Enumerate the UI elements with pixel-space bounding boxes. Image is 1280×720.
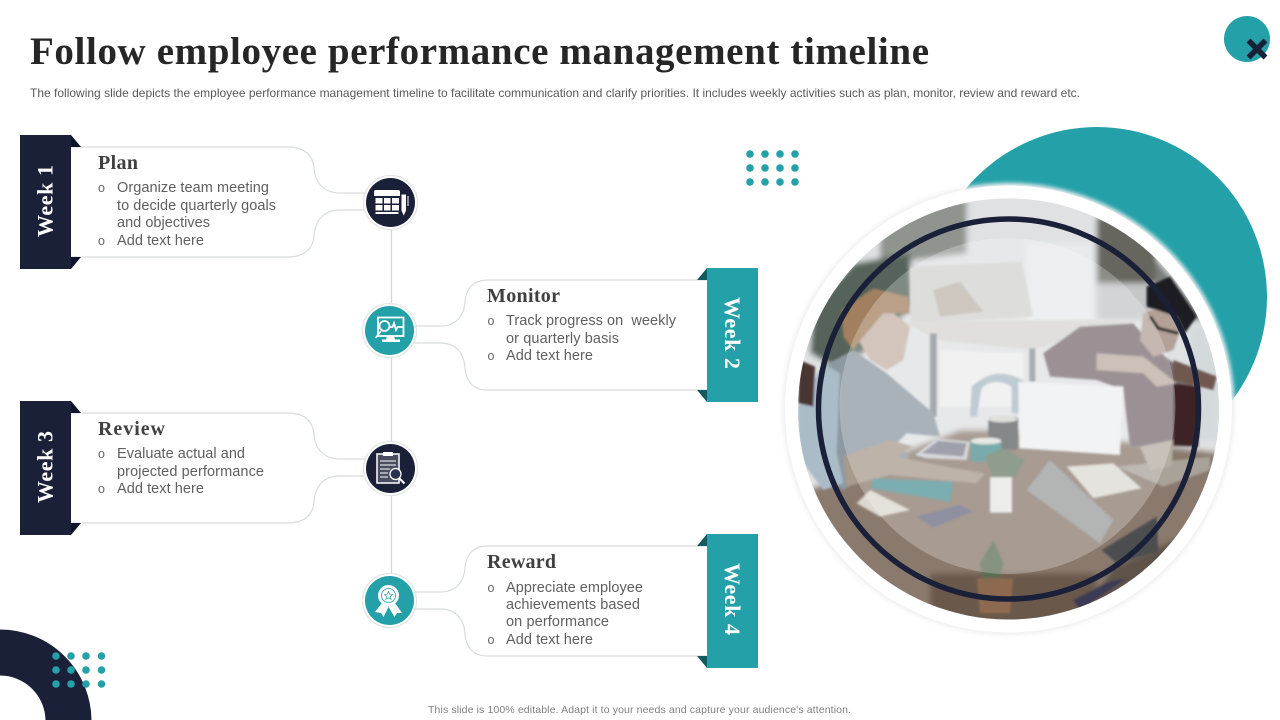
- bullets: review: Add text here: [117, 481, 204, 497]
- bullets: review: [98, 446, 264, 497]
- tab: week 2: [697, 268, 758, 402]
- panel outline: review: [71, 413, 366, 523]
- bullets: plan: o: [98, 181, 105, 195]
- bullets: plan: o: [98, 234, 105, 248]
- plant and pot: [985, 448, 1025, 478]
- heading: review: Review: [98, 418, 166, 440]
- tablet: [915, 438, 970, 460]
- icon: award ribbon: [362, 574, 416, 628]
- cups: [988, 417, 1018, 450]
- subtitle: The following slide depicts the employee performance management timeline to facilitate communication and clarify priorities. It includes weekly activities such as plan, monitor, review and reward etc.: [30, 86, 1080, 100]
- bullets: reward: o: [488, 633, 494, 647]
- bullets: monitor: Track progress on weekly: [506, 313, 677, 329]
- bullets: reward: achievements based: [506, 597, 640, 613]
- inner translucent circle: [840, 238, 1176, 574]
- tab: week 4: [697, 534, 758, 668]
- bullets: monitor: o: [488, 349, 494, 363]
- panel: week 2 monitor: [413, 268, 758, 402]
- open laptop foreground: [1027, 460, 1113, 543]
- heading: monitor: Monitor: [487, 285, 560, 307]
- phone: [917, 505, 973, 527]
- bullets: monitor: o: [488, 314, 494, 328]
- decorative teal circle: [927, 127, 1267, 467]
- tab: week 3: [20, 401, 81, 535]
- panel: week 1 plan: [20, 135, 366, 269]
- bullets: monitor: Add text here: [506, 348, 593, 364]
- tab: week 2: Week 2: [720, 297, 745, 369]
- navy ring: [818, 219, 1198, 599]
- close icon: [1224, 16, 1270, 62]
- tab: week 1: Week 1: [32, 165, 58, 237]
- panel: week 4 reward: [413, 534, 758, 668]
- photo: team meeting around table: [790, 190, 1230, 630]
- footer note: This slide is 100% editable. Adapt it to your needs and capture your audience's attention.: [428, 704, 851, 716]
- shelf: [910, 262, 1033, 323]
- bullets: review: projected performance: [117, 464, 264, 480]
- bullets: review: o: [98, 482, 105, 496]
- icon: clipboard review: [364, 442, 418, 496]
- left person: [800, 350, 940, 490]
- right person: [1043, 323, 1200, 447]
- panel outline: plan: [71, 147, 366, 257]
- panel outline: reward: [413, 546, 707, 656]
- bullets: plan: Organize team meeting: [117, 180, 269, 196]
- icon: calendar: [364, 176, 418, 230]
- heading: reward: Reward: [487, 551, 556, 573]
- panel outline: monitor: [413, 280, 707, 390]
- heading: plan: Plan: [98, 152, 138, 174]
- timeline spine: [390, 229, 392, 576]
- bullets: plan: to decide quarterly goals: [117, 198, 276, 214]
- table: [812, 427, 1215, 606]
- bottom plant: [980, 540, 1003, 578]
- bullets: plan: [98, 180, 276, 249]
- background: [808, 218, 1199, 438]
- papers: [1067, 463, 1142, 498]
- icon: monitor: [362, 304, 416, 358]
- tab: week 1: [20, 135, 81, 269]
- bullets: review: o: [98, 447, 105, 461]
- panel: week 3 review: [20, 401, 366, 535]
- bullets: reward: on performance: [506, 614, 609, 630]
- bullets: reward: Appreciate employee: [506, 580, 643, 596]
- bullets: monitor: [488, 313, 677, 364]
- laptop: [1018, 382, 1123, 455]
- bullets: monitor: or quarterly basis: [506, 331, 619, 347]
- bullets: reward: o: [488, 581, 494, 595]
- title: Follow employee performance management timeline: [30, 30, 929, 73]
- photo frame: [782, 183, 1234, 635]
- bullets: review: Evaluate actual and: [117, 446, 245, 462]
- bullets: reward: Add text here: [506, 632, 593, 648]
- decorative arc: bottom left: [0, 652, 68, 720]
- decorative dots: top: [746, 150, 799, 186]
- tab: week 3: Week 3: [32, 431, 58, 503]
- bullets: plan: and objectives: [117, 215, 210, 231]
- decorative dots: bottom: [52, 652, 105, 688]
- tab: week 4: Week 4: [720, 563, 745, 635]
- bullets: plan: Add text here: [117, 233, 204, 249]
- bullets: reward: [488, 580, 643, 648]
